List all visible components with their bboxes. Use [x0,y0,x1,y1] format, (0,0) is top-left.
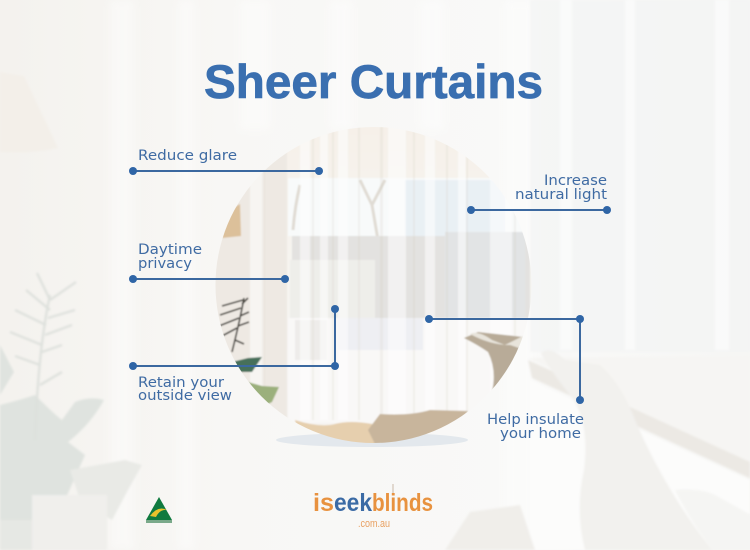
callout: help insulate your home: your home [500,426,581,442]
plants, faded [0,345,104,550]
left wall [216,166,287,416]
callout: reduce glare: Reduce glare [138,148,237,164]
patio [288,318,533,423]
callout: increase natural light: Increase [544,173,607,189]
callout: daytime privacy: privacy [138,256,192,272]
rug, faded [445,505,535,550]
rug [368,409,468,443]
logo: iseekblinds: .com.au [358,518,390,530]
callout: increase natural light [467,173,611,214]
title: Sheer Curtains [204,55,543,108]
tree [293,180,385,240]
callout: increase natural light: natural light [515,187,608,203]
chair, faded [541,350,712,550]
table, faded [528,356,750,462]
fence [292,236,530,318]
lamp [222,204,241,238]
floor [294,420,376,443]
circle shadow [276,433,468,447]
callout: help insulate your home [425,315,584,442]
photo circle: room with sheer curtains [216,127,531,447]
plant [219,298,249,352]
chair [464,332,523,392]
callout: retain your outside view: outside view [138,388,232,404]
callout: daytime privacy [129,242,289,283]
callout: help insulate your home: Help insulate [487,412,584,428]
garden [290,260,375,318]
logo: iseekblinds: is [313,489,334,517]
curtain folds [250,128,512,386]
callout: retain your outside view [129,305,339,404]
icon: Australian made logo [146,497,172,523]
callout: retain your outside view: Retain your [138,375,224,391]
callout: reduce glare [129,148,323,175]
sky [288,178,523,236]
callout: daytime privacy: Daytime [138,242,202,258]
logo: iseekblinds: eek [334,489,372,517]
logo: iseekblinds [313,484,433,530]
lamp shade, faded [0,72,58,152]
logo: iseekblinds: blinds [372,489,433,517]
